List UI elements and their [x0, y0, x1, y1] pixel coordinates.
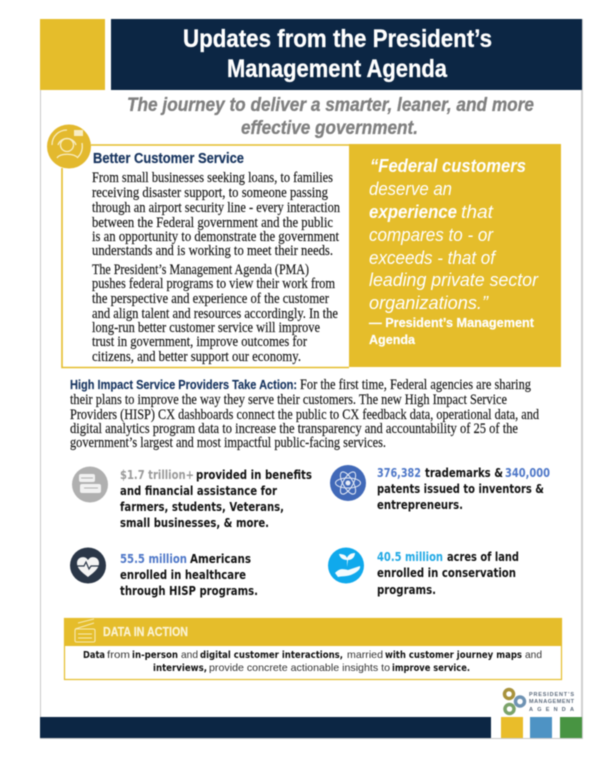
icon: money stacks [72, 466, 108, 502]
stat: trademarks and patents: entrepreneurs. [377, 497, 463, 512]
stat: conservation: enrolled in conservation [377, 565, 516, 580]
body text: The President’s Management Agenda (PMA) [92, 262, 309, 278]
body text: receiving disaster support, to someone passing [92, 185, 328, 201]
panel: quote [349, 144, 561, 367]
body text [92, 170, 340, 365]
body text: through an airport security line - every interaction [92, 200, 340, 216]
panel: data in action: from [107, 649, 130, 661]
text block: high impact service providers: their plans to improve the way they serve their customers. The new High Impact Service [70, 392, 507, 408]
title banner: Management Agenda [227, 55, 448, 83]
stat: trademarks and patents: 340,000 [505, 465, 550, 480]
logo: president's management agenda [504, 690, 575, 714]
text block: high impact service providers: digital analytics program data to increase the transparency and accountability of 25 of the [70, 421, 518, 437]
icon: hand holding plant [328, 548, 364, 584]
stat: conservation: acres of land [447, 549, 519, 564]
icon: atom [330, 465, 366, 501]
stat: trademarks and patents: 376,382 [377, 465, 421, 480]
panel: quote: exceeds - that of [369, 248, 497, 268]
body text: and align talent and resources accordingly. In the [92, 306, 338, 322]
panel: quote: “Federal customers [370, 156, 526, 176]
panel: data in action: in-person [132, 650, 178, 661]
panel: quote: deserve an [369, 179, 452, 199]
footer square: blue [530, 717, 552, 738]
footer bar [40, 717, 491, 738]
panel: data in action [64, 618, 562, 680]
panel: better customer service [47, 124, 561, 368]
text block: high impact service providers [70, 377, 539, 451]
text block: high impact service providers: High Impact Service Providers Take Action: [70, 377, 297, 392]
body text: From small businesses seeking loans, to families [92, 170, 333, 186]
panel: data in action: provide concrete actionable insights to [209, 662, 390, 674]
stat: healthcare [70, 548, 258, 598]
panel: data in action: improve service. [392, 663, 470, 674]
text block: high impact service providers: government’s largest and most impactful public-facing services. [70, 435, 386, 451]
body text: citizens, and better support our economy. [92, 349, 301, 365]
stat: trademarks and patents: patents issued to inventors & [377, 481, 544, 496]
text block: high impact service providers: For the first time, Federal agencies are sharing [300, 377, 531, 393]
icon: customer service agent [47, 124, 91, 168]
subtitle: effective government. [241, 118, 418, 139]
title banner [111, 19, 582, 90]
panel: data in action: Data [83, 650, 105, 661]
panel: data in action: digital customer interactions, [200, 650, 343, 661]
logo: president's management agenda: PRESIDENT’S [529, 692, 574, 698]
logo: president's management agenda: MANAGEMENT [529, 699, 575, 705]
panel: quote: Agenda [369, 333, 416, 347]
heading: Better Customer Service [93, 151, 244, 167]
body text: pushes federal programs to view their work from [92, 276, 335, 292]
stat: conservation: programs. [377, 582, 436, 597]
footer square: green [560, 717, 582, 738]
footer square: gold [501, 717, 523, 738]
panel: data in action: and [181, 649, 198, 661]
stat: conservation: 40.5 million [377, 549, 443, 564]
stat: benefits: farmers, students, Veterans, [120, 499, 284, 514]
body text: the perspective and experience of the customer [92, 291, 329, 307]
stat: healthcare: through HISP programs. [120, 583, 258, 598]
panel: quote: organizations.” [369, 293, 489, 313]
panel: quote: experience [369, 202, 457, 222]
panel: quote: — President’s Management [369, 316, 535, 330]
panel: data in action: interviews, [153, 663, 207, 674]
body text: is an opportunity to demonstrate the government [92, 229, 340, 245]
stat: benefits: small businesses, & more. [120, 515, 269, 530]
icon: heart with pulse [70, 548, 106, 584]
stat: benefits: $1.7 trillion+ [120, 467, 194, 482]
icon: clapperboard [75, 619, 95, 642]
header gold square [40, 19, 105, 90]
panel: quote: that [461, 202, 494, 222]
panel: data in action: and [525, 649, 542, 661]
stat: benefits: provided in benefits [196, 467, 312, 482]
panel: data in action: married [347, 649, 383, 661]
stat: conservation [328, 548, 519, 597]
panel: data in action: DATA IN ACTION [103, 624, 188, 639]
body text: between the Federal government and the public [92, 215, 333, 231]
stat: benefits: and financial assistance for [120, 483, 278, 498]
body text: long-run better customer service will improve [92, 320, 320, 336]
logo: president's management agenda: AGENDA [529, 707, 574, 713]
stat: trademarks and patents: trademarks & [425, 465, 503, 480]
body text: trust in government, improve outcomes for [92, 334, 307, 350]
stat: trademarks and patents [330, 465, 550, 512]
stat: benefits [72, 466, 312, 530]
subtitle [127, 95, 534, 139]
title banner: Updates from the President’s [183, 25, 492, 53]
stat: healthcare: enrolled in healthcare [120, 567, 246, 582]
panel: quote: leading private sector [369, 270, 539, 290]
stat: healthcare: 55.5 million [120, 551, 187, 566]
subtitle: The journey to deliver a smarter, leaner, and more [127, 95, 534, 116]
body text: understands and is working to meet their needs. [92, 243, 333, 259]
panel: quote: compares to - or [369, 225, 494, 245]
stat: healthcare: Americans [190, 551, 251, 566]
panel: data in action: with customer journey maps [385, 650, 522, 661]
